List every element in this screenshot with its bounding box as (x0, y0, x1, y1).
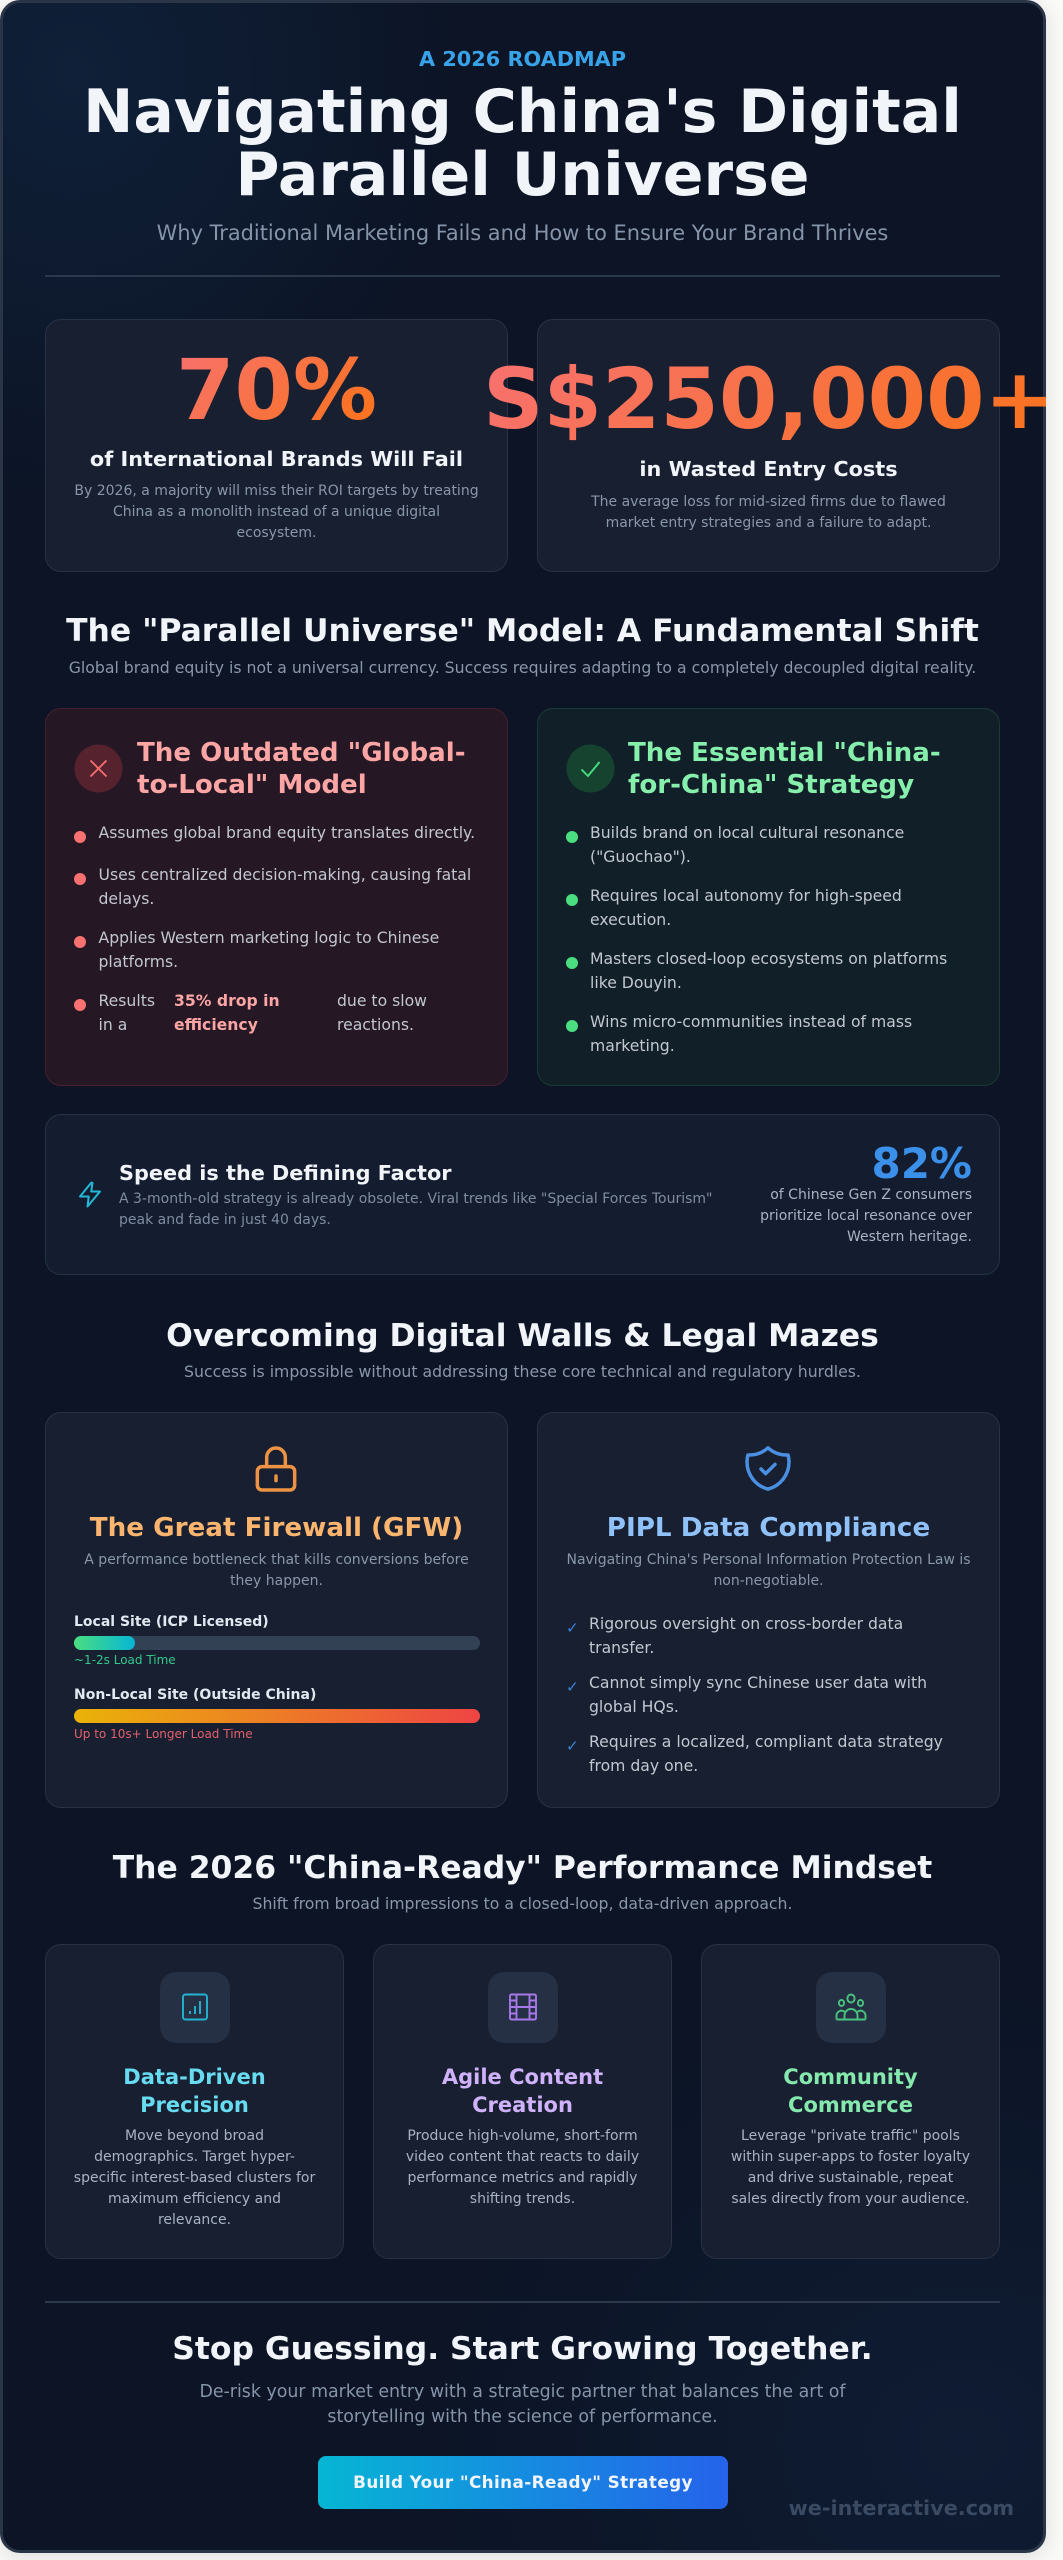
card description (731, 2128, 970, 2207)
cta description: storytelling with the science of performance. (327, 2406, 718, 2426)
cta button (318, 2456, 728, 2509)
bullet list: Requires local autonomy for high-speed (590, 886, 902, 905)
bullet list: Assumes global brand equity translates directly. (98, 823, 475, 842)
check list: Cannot simply sync Chinese user data with (589, 1673, 927, 1692)
section subtitle: Success is impossible without addressing these core technical and regulatory hurdles. (184, 1362, 861, 1381)
panel: china-for-china strategy (537, 708, 1000, 1086)
card description (406, 2128, 639, 2207)
card description (74, 2128, 316, 2228)
check list: global HQs. (589, 1697, 679, 1716)
cta description: De-risk your market entry with a strategic partner that balances the art of (199, 2382, 846, 2402)
bullet list (566, 823, 947, 1055)
bullet list: platforms. (98, 952, 178, 971)
stat caption: prioritize local resonance over (760, 1208, 972, 1224)
panel: agile content creation (373, 1944, 672, 2259)
cta description (199, 2382, 846, 2426)
card description: sales directly from your audience. (731, 2191, 970, 2207)
panel title (137, 738, 466, 800)
speed description: peak and fade in just 40 days. (119, 1212, 331, 1228)
panel description (566, 1552, 971, 1589)
panel: S$250,000+ stat (537, 319, 1000, 572)
icon: lock (256, 1446, 296, 1492)
panel title: The Essential "China- (628, 738, 941, 768)
heading: parallel universe model: The "Parallel Universe" Model: A Fundamental Shift (66, 613, 979, 649)
icon: check mark (566, 744, 614, 792)
card title: Agile Content (442, 2065, 603, 2089)
stat 82%: 82% (871, 1139, 972, 1188)
check list: Rigorous oversight on cross-border data (589, 1614, 903, 1633)
panel title: to-Local" Model (137, 770, 367, 800)
stat description: China as a monolith instead of a unique digital (113, 504, 440, 520)
section subtitle: Shift from broad impressions to a closed-loop, data-driven approach. (252, 1894, 792, 1913)
stat caption (760, 1187, 972, 1245)
check list: transfer. (589, 1638, 654, 1657)
check list: from day one. (589, 1756, 698, 1775)
card description: demographics. Target hyper- (94, 2149, 295, 2165)
stat caption: Western heritage. (847, 1229, 972, 1245)
stat description (74, 483, 479, 541)
eyebrow: a 2026 roadmap: A 2026 ROADMAP (419, 47, 626, 71)
card title: Precision (140, 2093, 249, 2117)
icon: report chart (160, 1972, 230, 2043)
card title: Creation (472, 2093, 573, 2117)
bullet list: due to slow (337, 991, 427, 1010)
caption local: ~1-2s Load Time (74, 1653, 176, 1667)
check list: ✓ (566, 1619, 579, 1637)
bullet list: Builds brand on local cultural resonance (590, 823, 904, 842)
panel description: Navigating China's Personal Information Protection Law is (566, 1552, 971, 1568)
stat description: By 2026, a majority will miss their ROI targets by treating (74, 483, 479, 499)
panel: data-driven precision (45, 1944, 344, 2259)
check list (566, 1614, 943, 1775)
card description: specific interest-based clusters for (74, 2170, 315, 2186)
panel: outdated model (45, 708, 508, 1086)
stat description (591, 494, 946, 531)
stat heading: of International Brands Will Fail (90, 447, 463, 471)
section subtitle: Global brand equity is not a universal currency. Success requires adapting to a completely decoupled digital reality. (69, 658, 976, 677)
panel title: The Outdated "Global- (137, 738, 466, 768)
panel description: non-negotiable. (713, 1573, 824, 1589)
card description: Leverage "private traffic" pools (741, 2128, 960, 2144)
panel: speed (45, 1114, 1000, 1275)
bullet list: Uses centralized decision-making, causing fatal (98, 865, 471, 884)
panel title: for-China" Strategy (628, 770, 914, 800)
bullet list: Applies Western marketing logic to Chinese (98, 928, 439, 947)
card description: Produce high-volume, short-form (407, 2128, 638, 2144)
icon: x mark (74, 744, 122, 792)
heading: call to action: Stop Guessing. Start Growing Together. (172, 2331, 873, 2367)
panel: great firewall (45, 1412, 508, 1808)
icon: shield (745, 1446, 791, 1491)
heading: performance mindset: The 2026 "China-Ready" Performance Mindset (113, 1850, 932, 1886)
bar label non-local: Non-Local Site (Outside China) (74, 1687, 316, 1703)
icon: film (488, 1972, 558, 2043)
icon: people group (816, 1972, 886, 2043)
card description: performance metrics and rapidly (408, 2170, 637, 2186)
bullet list (74, 823, 475, 1034)
card title: Data-Driven (123, 2065, 266, 2089)
speed description: A 3-month-old strategy is already obsolete. Viral trends like "Special Forces Tourism" (119, 1190, 712, 1206)
bullet list: Masters closed-loop ecosystems on platforms (590, 949, 947, 968)
panel title (628, 738, 941, 800)
bullet list: execution. (590, 910, 671, 929)
bullet list: efficiency (174, 1015, 258, 1034)
title: Navigating China's Digital (83, 76, 962, 146)
panel description (84, 1552, 469, 1589)
heading: digital walls: Overcoming Digital Walls & Legal Mazes (166, 1318, 879, 1354)
bar: local (74, 1636, 480, 1650)
check list: ✓ (566, 1737, 579, 1755)
bullet list: marketing. (590, 1036, 675, 1055)
card title (123, 2065, 266, 2117)
stat number 70%: 70% (176, 340, 377, 438)
bullet list: in a (98, 1015, 127, 1034)
card description: maximum efficiency and (108, 2191, 281, 2207)
panel description: they happen. (230, 1573, 323, 1589)
title (83, 76, 962, 210)
panel title: The Great Firewall (GFW) (90, 1513, 463, 1543)
icon: lightning bolt (79, 1182, 101, 1208)
caption non-local: Up to 10s+ Longer Load Time (74, 1727, 253, 1741)
stat number S$250,000+: S$250,000+ (483, 350, 1055, 448)
title: Parallel Universe (235, 140, 810, 210)
stat description: ecosystem. (237, 525, 316, 541)
stat caption: of Chinese Gen Z consumers (770, 1187, 972, 1203)
bullet list: ("Guochao"). (590, 847, 691, 866)
check list: Requires a localized, compliant data strategy (589, 1732, 943, 1751)
bar: non-local (74, 1709, 480, 1723)
bar label local: Local Site (ICP Licensed) (74, 1614, 269, 1630)
cta button: Build Your "China-Ready" Strategy (353, 2472, 693, 2492)
panel: pipl compliance (537, 1412, 1000, 1808)
check list: ✓ (566, 1678, 579, 1696)
panel description: A performance bottleneck that kills conversions before (84, 1552, 469, 1568)
card title: Community (783, 2065, 918, 2089)
panel: community commerce (701, 1944, 1000, 2259)
subtitle: Why Traditional Marketing Fails and How to Ensure Your Brand Thrives (157, 221, 888, 245)
bullet list: reactions. (337, 1015, 414, 1034)
bullet list: 35% drop in (174, 991, 280, 1010)
speed heading: Speed is the Defining Factor (119, 1161, 452, 1185)
speed description (119, 1190, 712, 1228)
card description: relevance. (158, 2212, 231, 2228)
stat description: market entry strategies and a failure to adapt. (606, 515, 931, 531)
bullet list: Wins micro-communities instead of mass (590, 1012, 912, 1031)
panel: 70% stat (45, 319, 508, 572)
card title (442, 2065, 603, 2117)
card description: within super-apps to foster loyalty (731, 2149, 970, 2165)
watermark: we-interactive.com (789, 2496, 1014, 2520)
bullet list: delays. (98, 889, 154, 908)
card description: Move beyond broad (125, 2128, 264, 2144)
bullet list: Results (98, 991, 155, 1010)
card title (783, 2065, 918, 2117)
panel title: PIPL Data Compliance (607, 1513, 930, 1543)
card description: video content that reacts to daily (406, 2149, 639, 2165)
stat description: The average loss for mid-sized firms due to flawed (591, 494, 946, 510)
card description: and drive sustainable, repeat (748, 2170, 953, 2186)
bullet list: like Douyin. (590, 973, 682, 992)
stat heading: in Wasted Entry Costs (639, 457, 898, 481)
card description: shifting trends. (470, 2191, 575, 2207)
card title: Commerce (788, 2093, 913, 2117)
